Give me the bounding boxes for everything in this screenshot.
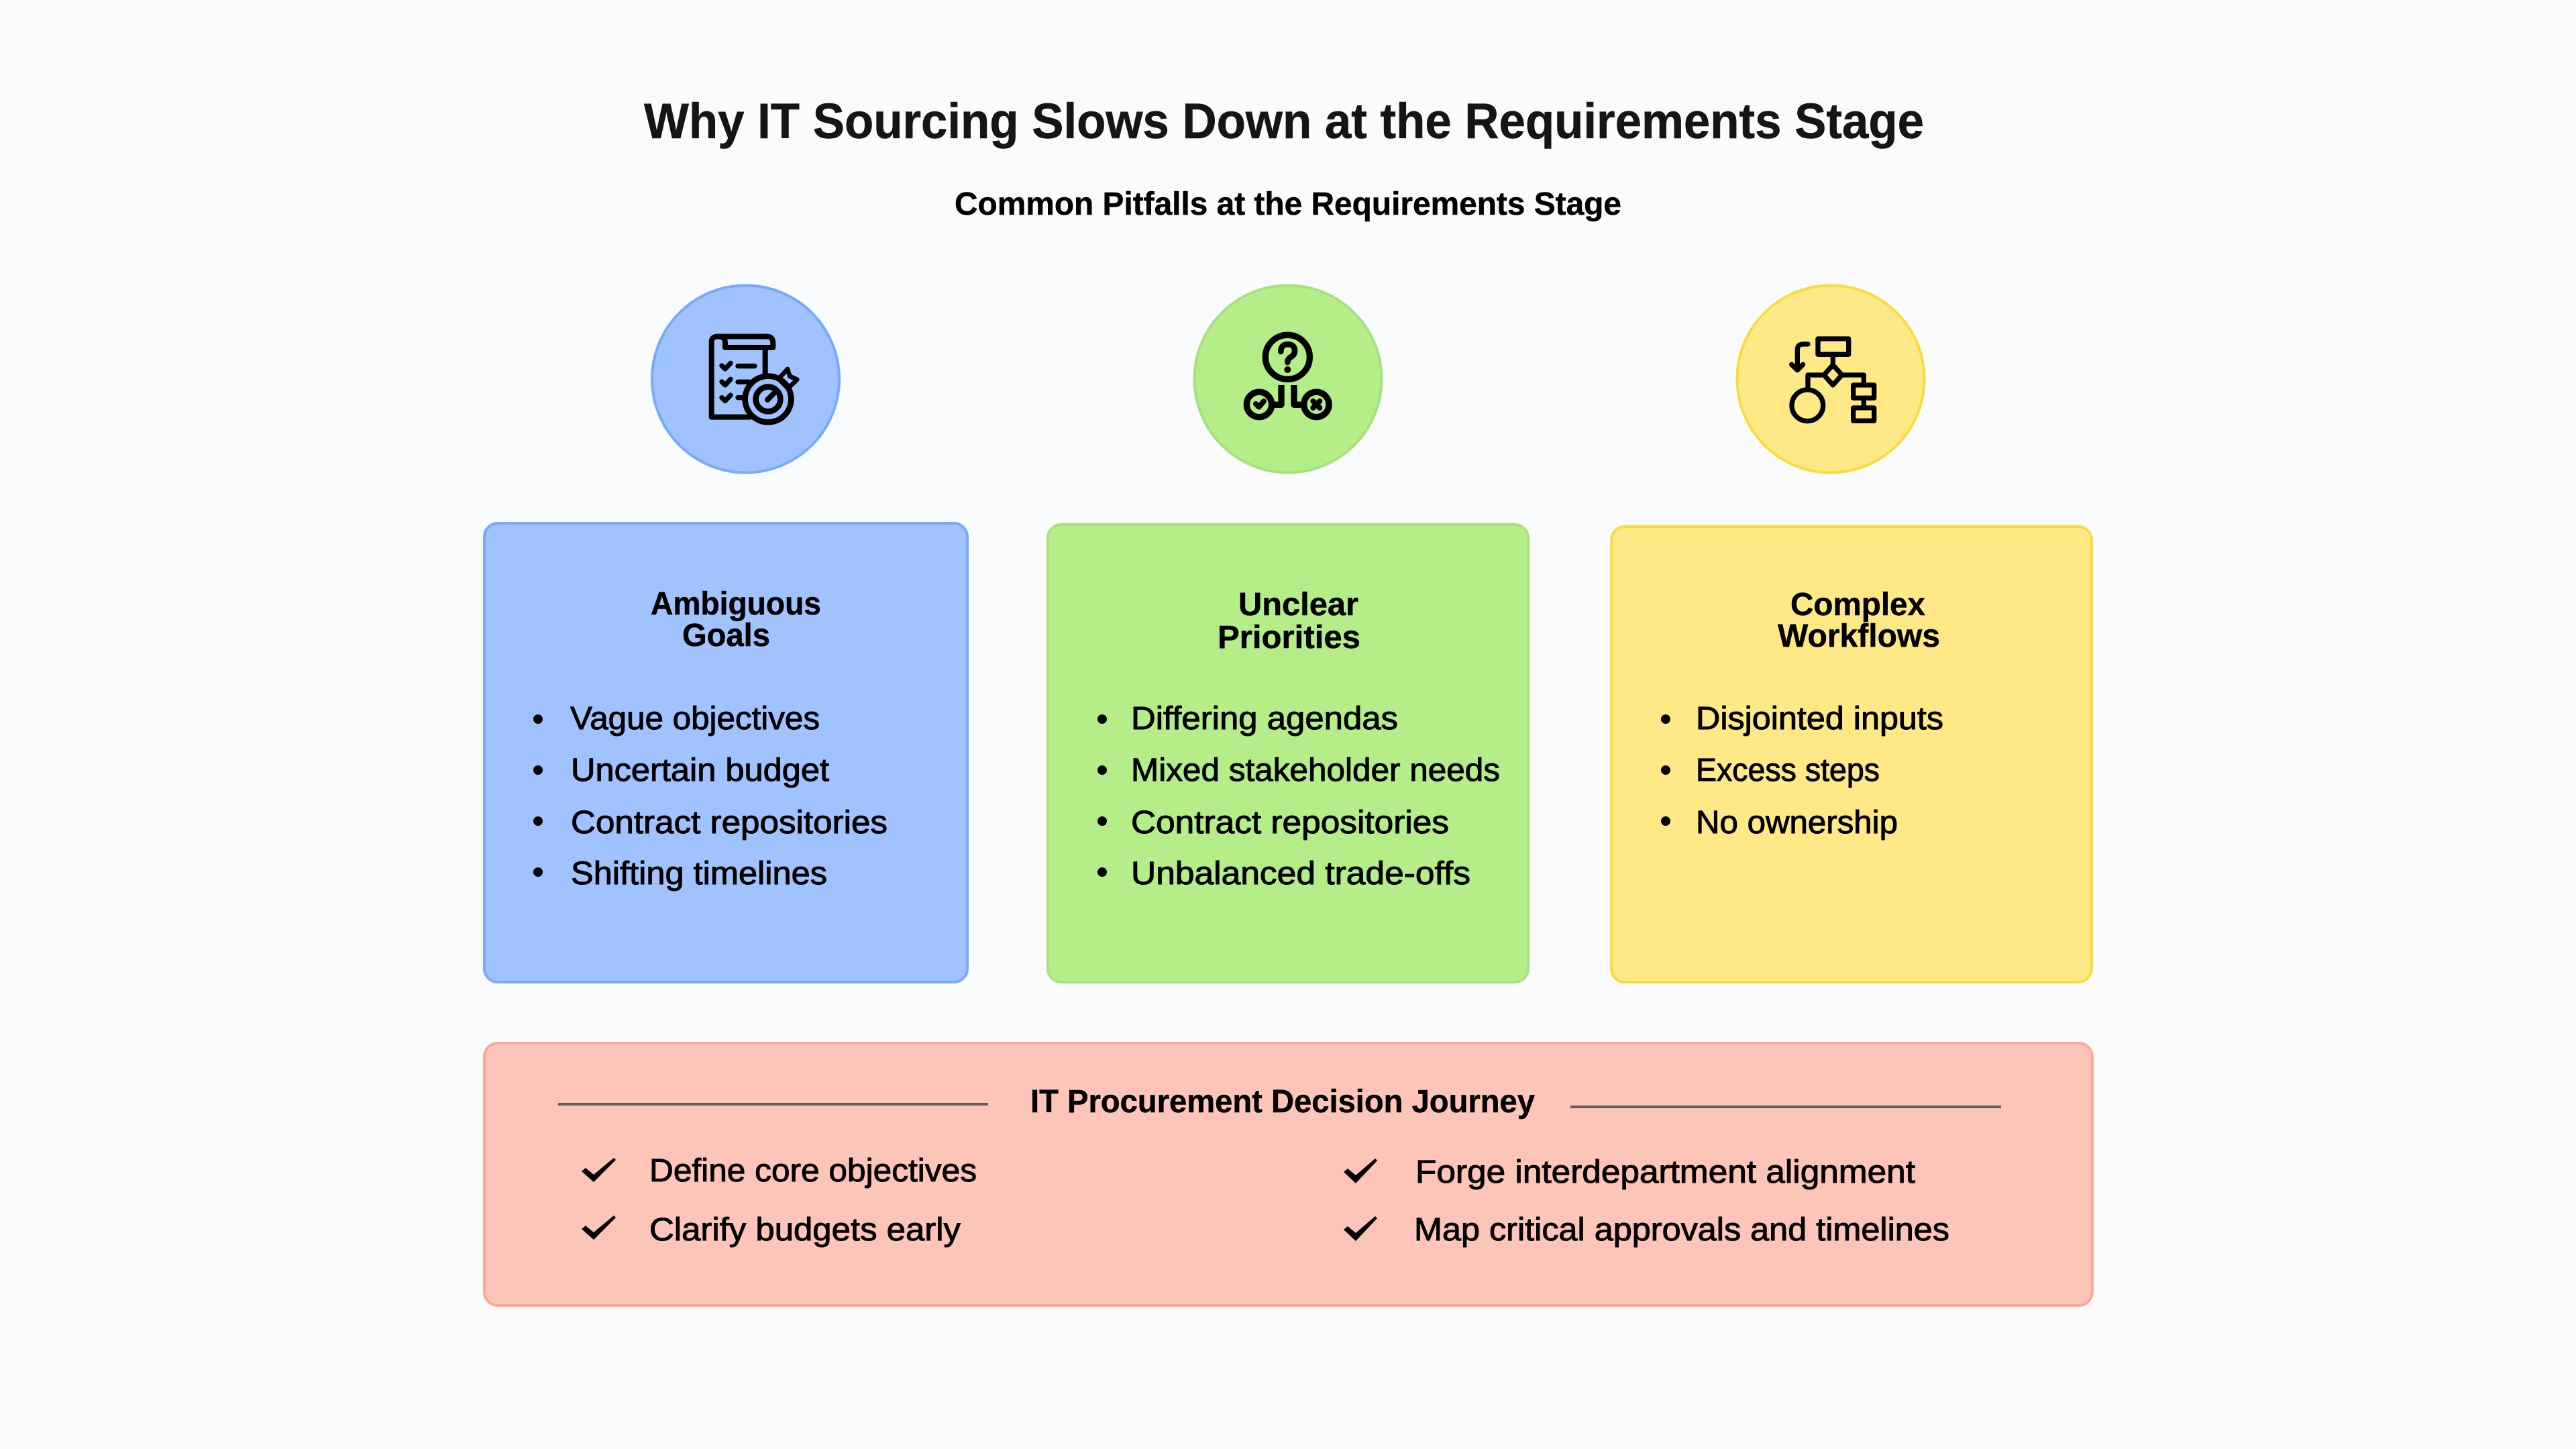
heading: ambiguous goals: Ambiguous [651,586,821,622]
list: complex workflows [1661,701,1943,841]
heading: journey: IT Procurement Decision Journey [1030,1084,1535,1120]
heading: unclear priorities: Priorities [1218,620,1360,655]
subtitle: Common Pitfalls at the Requirements Stage [955,186,1621,222]
heading: complex workflows: Workflows [1778,619,1940,654]
item: forge interdepartment alignment: Forge interdepartment alignment [1415,1155,1915,1190]
list: ambiguous goals: Uncertain budget [571,753,829,788]
heading: ambiguous goals [651,586,821,653]
icon: checklist with target in blue circle [652,286,839,472]
item: clarify budgets early: Clarify budgets early [649,1212,961,1248]
icon: flowchart in yellow circle [1737,286,1924,472]
list: ambiguous goals: Contract repositories [571,805,888,841]
item: map critical approvals and timelines: Map critical approvals and timelines [1414,1212,1949,1248]
heading: complex workflows [1778,587,1940,654]
icon: question with check and cross in green circle [1194,286,1382,472]
list: complex workflows: No ownership [1696,805,1898,841]
list: unclear priorities: Contract repositories [1131,805,1449,841]
list: ambiguous goals: Shifting timelines [571,856,827,892]
title: Why IT Sourcing Slows Down at the Requirements Stage [644,93,1924,149]
list: unclear priorities: Mixed stakeholder needs [1131,753,1500,788]
heading: ambiguous goals: Goals [682,618,770,653]
list: complex workflows: Excess steps [1696,753,1880,788]
list: ambiguous goals [533,701,888,892]
heading: unclear priorities [1218,587,1360,655]
panel: it procurement decision journey [484,1043,2092,1305]
list: unclear priorities: Differing agendas [1131,701,1398,737]
heading: complex workflows: Complex [1790,587,1925,623]
list: unclear priorities [1097,701,1500,892]
panel: complex workflows [1611,527,2092,982]
list: ambiguous goals: Vague objectives [570,701,820,737]
item: define core objectives: Define core objectives [649,1153,977,1189]
list: complex workflows: Disjointed inputs [1696,701,1943,737]
heading: unclear priorities: Unclear [1238,587,1358,623]
list: unclear priorities: Unbalanced trade-offs [1131,856,1470,892]
panel: ambiguous goals [484,523,967,982]
panel: unclear priorities [1048,525,1528,982]
